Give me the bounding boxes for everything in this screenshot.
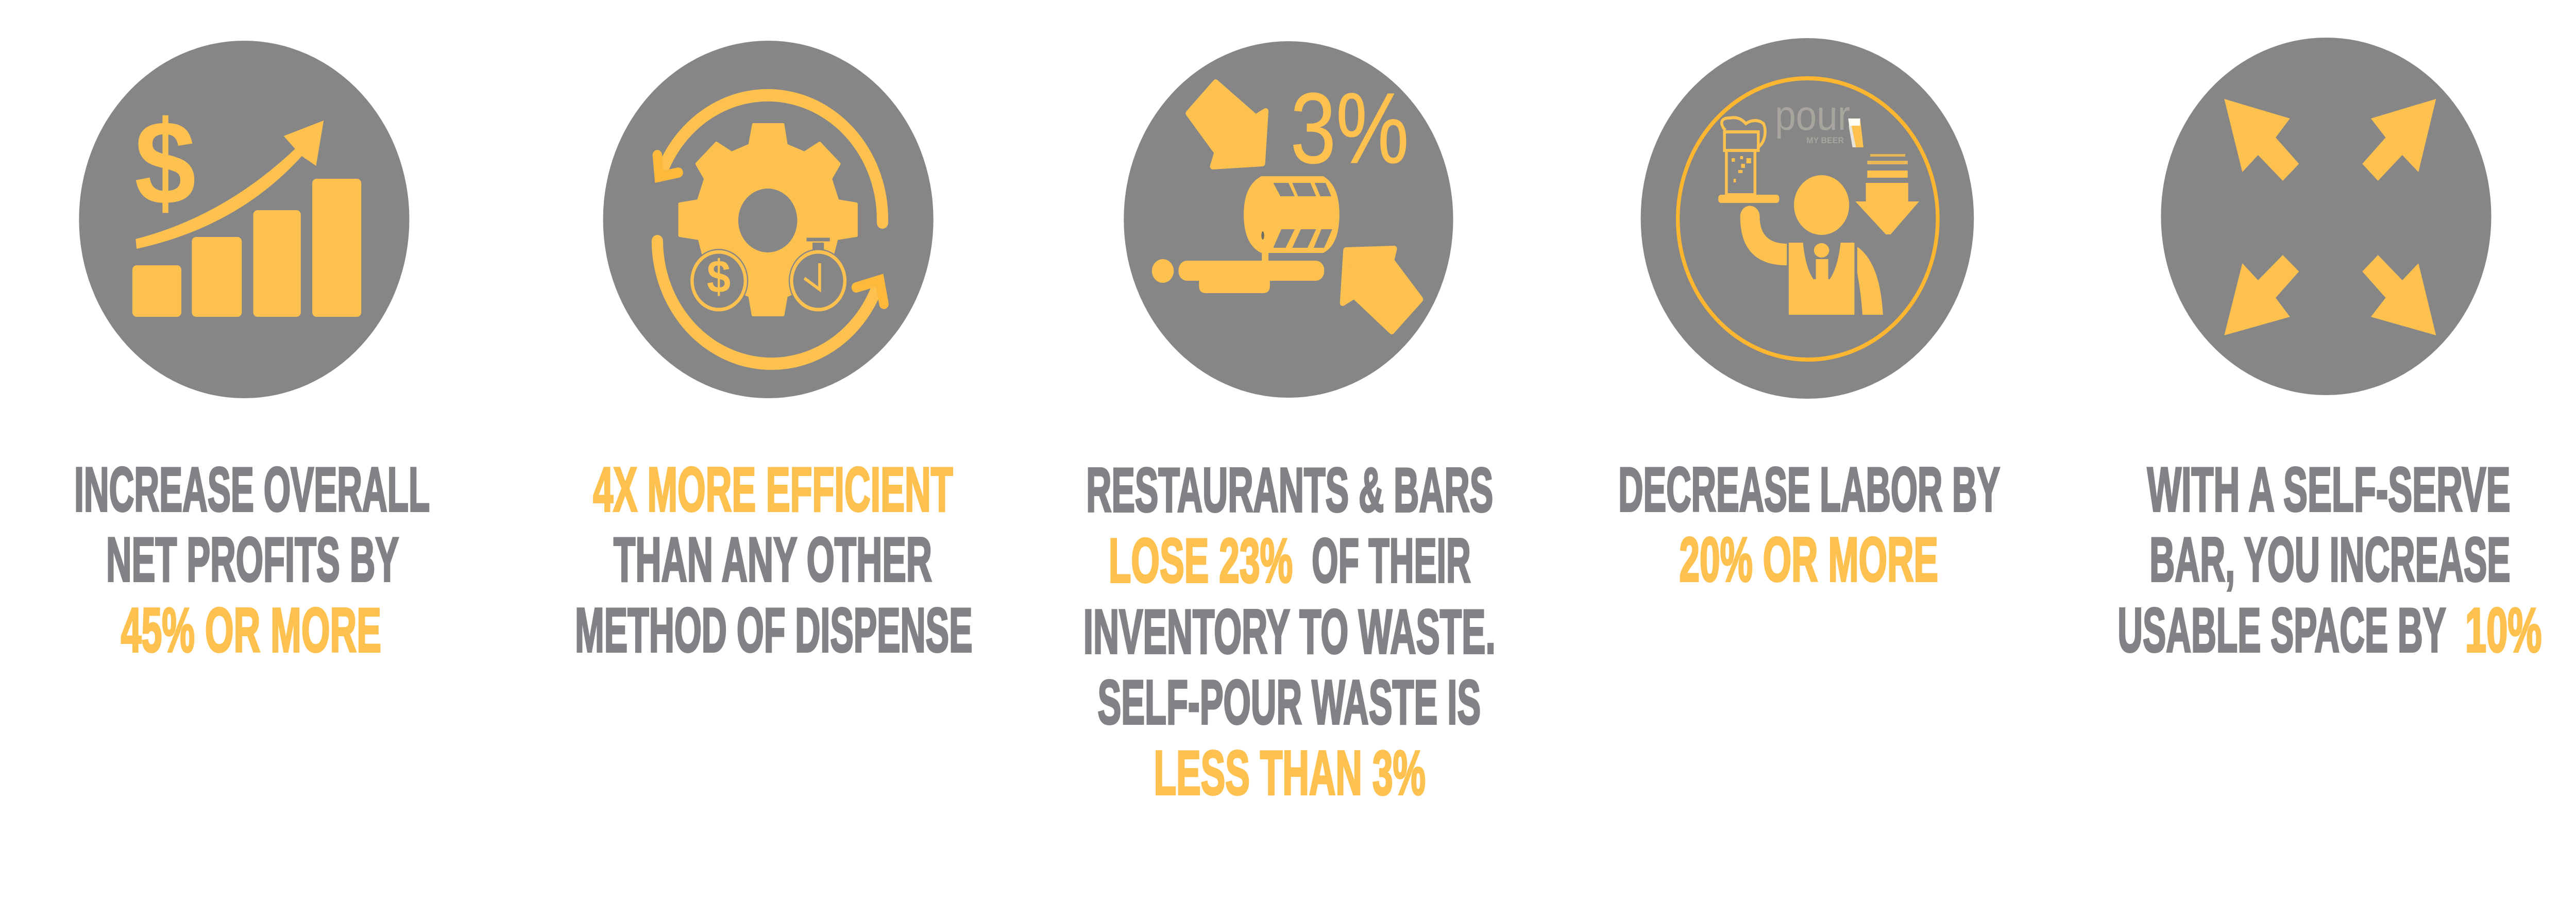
arrow: upper cycle [657,95,883,223]
text: increase overall net profits: INCREASE OVERALL [74,454,430,524]
panel: decrease labor [1618,38,2000,594]
text: increase overall net profits: NET PROFITS BY [106,524,399,594]
arrow: growth curve [135,121,324,249]
text: decrease labor: DECREASE LABOR BY [1618,454,2000,524]
panel: usable space [2117,38,2541,665]
text: decrease labor [1618,454,2000,594]
icon: keg with 3 percent waste [1124,41,1453,398]
icon: spill tray [1152,259,1324,293]
icon: rising profits bar chart [79,41,410,398]
text: 4x more efficient: THAN ANY OTHER [614,524,932,594]
text: self-serve bar space [2117,454,2541,665]
text: lose 23 percent: LOSE 23% [1109,525,1293,596]
arrow: lower cycle [657,241,884,364]
text: lose 23 percent: INVENTORY TO WASTE. [1083,597,1496,667]
icon: gear with cycle arrows [603,41,934,398]
text: decrease labor: 20% OR MORE [1679,524,1938,594]
text: 4x more efficient: METHOD OF DISPENSE [575,595,972,665]
arrow: down left [2224,255,2299,335]
panel: reduced waste [1083,41,1496,808]
text: 4x more efficient [575,454,972,665]
arrow: pointing up left [1343,249,1420,331]
text: 4x more efficient: 4X MORE EFFICIENT [593,454,953,524]
icon: coin: $ [707,251,731,303]
icon: bartender figure [1740,175,1883,315]
text: increase overall net profits [74,454,430,665]
arrow: up left [2224,99,2299,181]
logo: pour my beer: pour [1775,92,1850,139]
text: lose 23 percent: LESS THAN 3% [1154,738,1426,808]
icon: stopwatch [789,236,848,313]
icon: dollar sign: $ [134,96,196,230]
icon: four expanding arrows [2161,38,2492,395]
text: 3 percent: 3% [1291,72,1409,184]
text: lose 23 percent: SELF-POUR WASTE IS [1097,667,1481,737]
arrow: up right [2362,99,2436,181]
icon: beer mug on tray [1718,117,1779,203]
panel: increase net profits [74,41,430,665]
text: increase overall net profits: 45% OR MORE [121,595,381,665]
icon: bartender with beer [1641,38,1974,399]
icon: coin [689,249,748,313]
text: lose 23 percent: OF THEIR [1312,525,1471,596]
panel: more efficient [575,41,972,665]
text: lose 23 percent [1083,455,1496,808]
text: lose 23 percent: RESTAURANTS & BARS [1086,455,1493,525]
logo: pour my beer: MY BEER [1806,135,1844,145]
bar chart bars [132,179,361,317]
icon: gear [680,125,856,315]
arrow: labor going down [1855,154,1919,234]
arrow: down right [2362,255,2436,335]
arrow: pointing down right [1189,82,1266,166]
icon: keg [1244,176,1340,264]
